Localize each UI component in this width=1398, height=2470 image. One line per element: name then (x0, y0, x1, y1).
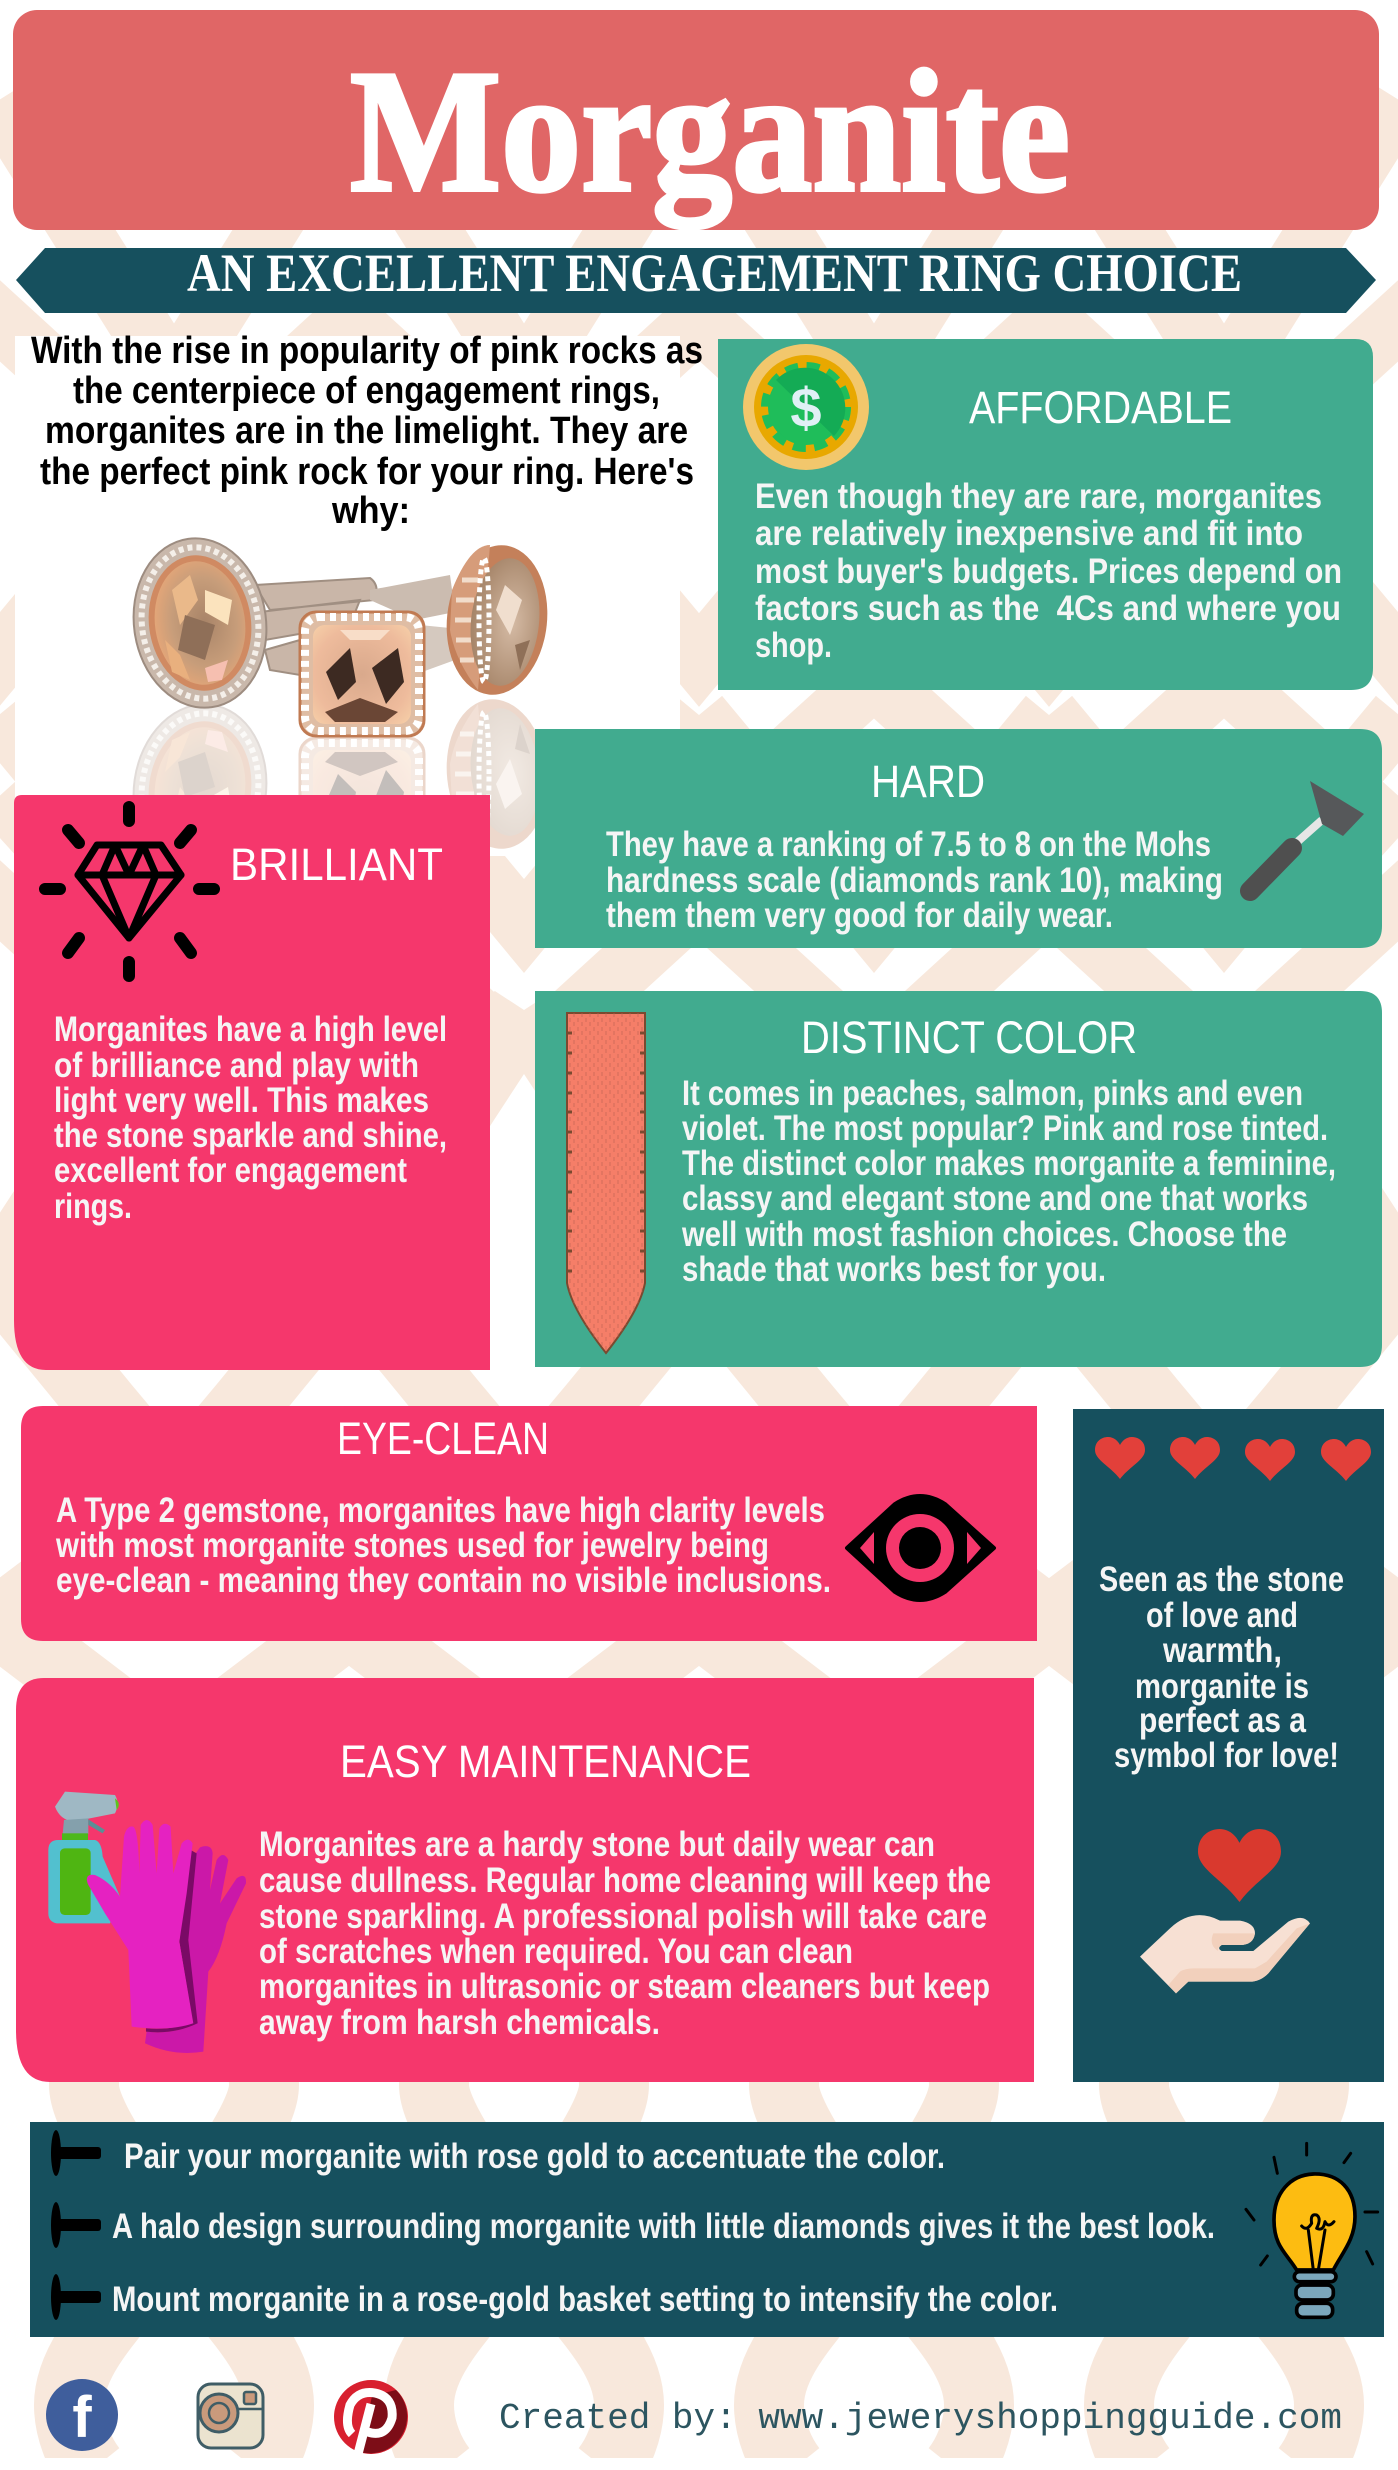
icon: eye (847, 1496, 994, 1600)
body text: Morganites are a hardy stone but daily wear can (259, 1825, 935, 1864)
body text: Even though they are rare, morganites (755, 477, 1322, 516)
body text: shop. (755, 626, 832, 665)
body text: with most morganite stones used for jewelry being (55, 1526, 769, 1565)
icon: light bulb (1246, 2143, 1378, 2317)
tip 2: A halo design surrounding morganite with little diamonds gives it the best look. (112, 2207, 1215, 2246)
intro text: morganites are in the limelight. They are (45, 410, 688, 452)
body text (606, 825, 1223, 935)
body text: shade that works best for you. (682, 1250, 1106, 1289)
body text: eye-clean - meaning they contain no visible inclusions. (56, 1561, 831, 1600)
intro text (31, 330, 703, 532)
body text: Morganites have a high level (54, 1010, 447, 1049)
panel: hard (535, 729, 1382, 948)
intro text: the perfect pink rock for your ring. Here's (40, 451, 694, 493)
tip 1: Pair your morganite with rose gold to accentuate the color. (124, 2137, 945, 2176)
panel: easy maintenance (16, 1678, 1034, 2082)
body text (755, 477, 1342, 665)
title: Morganite (350, 34, 1070, 229)
body text: cause dullness. Regular home cleaning will keep the (259, 1861, 991, 1900)
body text (1099, 1560, 1344, 1775)
icon: pin 1 (51, 2130, 101, 2176)
heading: HARD (871, 756, 985, 807)
subtitle ribbon (16, 243, 1376, 313)
panel: tips (30, 2122, 1384, 2337)
icon: hand holding heart (1140, 1829, 1310, 1993)
body text: of scratches when required. You can clean (259, 1932, 853, 1971)
panel: symbol for love (1073, 1409, 1384, 2082)
body text: morganites in ultrasonic or steam cleaners but keep (259, 1967, 990, 2006)
body text (54, 1010, 447, 1226)
body text: excellent for engagement (54, 1151, 407, 1190)
body text: them them very good for daily wear. (606, 896, 1113, 935)
icon: pin 3 (51, 2274, 101, 2320)
icon: dollar coin (743, 344, 869, 470)
icon: instagram (198, 2384, 263, 2448)
icon: dollar coin: $ (790, 376, 822, 439)
body text: the stone sparkle and shine, (54, 1116, 447, 1155)
body text: rings. (54, 1187, 132, 1226)
credit line: Created by: www.jeweryshoppingguide.com (499, 2398, 1342, 2439)
body text: of brilliance and play with (54, 1046, 419, 1085)
heading: BRILLIANT (230, 839, 443, 890)
intro text: why: (331, 490, 410, 532)
body text: are relatively inexpensive and fit into (755, 514, 1303, 553)
panel: distinct color (535, 991, 1382, 1367)
panel: affordable (718, 339, 1373, 690)
body text: factors such as the 4Cs and where you (755, 589, 1341, 628)
body text: away from harsh chemicals. (259, 2003, 660, 2042)
body text: of love and (1146, 1596, 1298, 1635)
heading: EASY MAINTENANCE (340, 1736, 751, 1787)
icon: hammer (1250, 781, 1364, 891)
heading: DISTINCT COLOR (801, 1012, 1137, 1063)
icon: four hearts (1095, 1437, 1371, 1481)
body text: Seen as the stone (1099, 1560, 1344, 1599)
intro text: the centerpiece of engagement rings, (73, 370, 660, 412)
icon: pinterest (334, 2380, 408, 2454)
title banner (13, 10, 1379, 230)
rings photo (123, 530, 555, 882)
body text (681, 1074, 1336, 1289)
body text: morganite is (1135, 1667, 1309, 1706)
icon: pin 2 (51, 2202, 101, 2248)
body text: symbol for love! (1114, 1736, 1339, 1775)
body text: light very well. This makes (54, 1081, 429, 1120)
panel: eye-clean (21, 1406, 1037, 1641)
body text: perfect as a (1139, 1701, 1306, 1740)
body text (55, 1491, 831, 1600)
body text: stone sparkling. A professional polish will take care (259, 1897, 987, 1936)
subtitle: AN EXCELLENT ENGAGEMENT RING CHOICE (187, 243, 1242, 303)
icon: diamond (45, 807, 214, 976)
intro text: With the rise in popularity of pink rocks as (31, 330, 703, 372)
body text: well with most fashion choices. Choose the (681, 1215, 1287, 1254)
icon: facebook: f (72, 2385, 92, 2450)
icon: facebook (46, 2379, 118, 2451)
icon: salmon color swatch (567, 1013, 645, 1353)
body text: hardness scale (diamonds rank 10), making (606, 861, 1223, 900)
icon: spray bottle and gloves (48, 1792, 246, 2053)
body text (259, 1825, 991, 2042)
body text: A Type 2 gemstone, morganites have high clarity levels (56, 1491, 825, 1530)
panel: brilliant (14, 795, 490, 1370)
tip 3: Mount morganite in a rose-gold basket setting to intensify the color. (112, 2280, 1058, 2319)
body text: warmth, (1162, 1631, 1282, 1670)
body text: They have a ranking of 7.5 to 8 on the Mohs (606, 825, 1211, 864)
heading: AFFORDABLE (969, 382, 1232, 433)
heading: EYE-CLEAN (337, 1413, 549, 1464)
